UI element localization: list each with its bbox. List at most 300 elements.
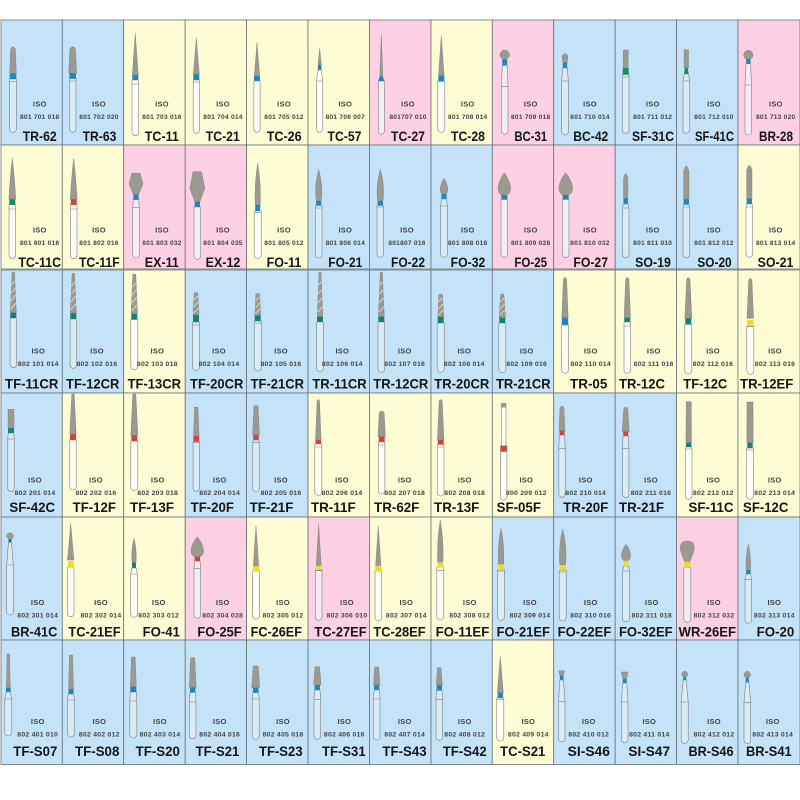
iso code: 801 813 014 <box>756 240 795 247</box>
iso code: 801 809 028 <box>511 240 550 247</box>
name: TC-S21 <box>500 743 546 759</box>
cell TF-12F <box>62 393 124 517</box>
name: TR-62 <box>23 128 57 144</box>
name: TF-13CR <box>128 376 181 392</box>
iso code: ISO <box>520 346 534 356</box>
iso code: ISO <box>768 346 782 356</box>
iso code: 801 706 007 <box>326 114 365 121</box>
bur <box>562 278 568 373</box>
bur <box>746 402 754 499</box>
name: SF-11C <box>688 499 734 515</box>
iso code: ISO <box>647 346 661 356</box>
iso code: 802 105 016 <box>261 361 301 368</box>
name: EX-12 <box>206 254 241 270</box>
name: TC-26 <box>267 128 302 144</box>
iso code: 802 203 018 <box>137 490 178 497</box>
iso code: ISO <box>92 717 106 726</box>
iso code: ISO <box>767 598 781 607</box>
iso code: ISO <box>212 346 226 356</box>
bur <box>254 43 260 132</box>
iso code <box>386 598 427 620</box>
iso code: ISO <box>706 346 720 356</box>
iso code: 801 801 016 <box>20 240 59 247</box>
bur <box>70 394 76 490</box>
name: TC-11 <box>145 128 179 144</box>
iso code: ISO <box>584 346 598 356</box>
bur <box>8 409 14 492</box>
cell TR-20CR <box>431 270 492 393</box>
iso code: 801 705 012 <box>264 114 304 121</box>
iso code <box>568 717 609 738</box>
iso code <box>263 598 303 620</box>
name: TC-57 <box>328 128 362 144</box>
cell TC-28 <box>431 20 492 145</box>
iso code: ISO <box>766 717 780 726</box>
bur <box>191 537 204 618</box>
name: BC-31 <box>514 128 547 144</box>
name: TR-62F <box>374 499 420 515</box>
iso code: ISO <box>579 476 593 484</box>
name: TF-21CR <box>251 376 304 392</box>
name: TR-12C <box>619 376 665 392</box>
name: TC-27EF <box>314 624 367 640</box>
iso code <box>384 717 425 738</box>
name: TF-S23 <box>259 743 303 759</box>
iso code: ISO <box>31 598 45 607</box>
bur <box>437 520 444 620</box>
cell TF-21CR <box>247 270 308 393</box>
iso code: ISO <box>153 717 167 726</box>
iso code: ISO <box>401 100 415 108</box>
name: FO-20 <box>757 624 795 640</box>
name: TR-11CR <box>312 376 367 392</box>
bur <box>683 50 690 133</box>
iso code: 802 413 014 <box>752 732 793 738</box>
cell TF-S43 <box>370 640 431 764</box>
iso code: ISO <box>707 717 721 726</box>
iso code: ISO <box>92 100 106 108</box>
iso code <box>752 717 793 738</box>
iso code <box>756 100 795 121</box>
bur <box>436 668 443 740</box>
iso code: 802 104 014 <box>199 361 239 368</box>
bur <box>10 47 16 132</box>
iso code <box>137 476 178 497</box>
iso code: 802 109 016 <box>506 361 547 368</box>
bur <box>438 36 445 132</box>
bur <box>192 293 200 370</box>
bur <box>685 402 692 499</box>
iso code: 801 708 014 <box>448 114 487 121</box>
iso code <box>261 476 301 497</box>
bur <box>130 657 137 738</box>
iso code: 801 806 014 <box>326 240 365 247</box>
bur <box>437 294 444 372</box>
iso code: ISO <box>151 476 165 484</box>
cell BR-S46 <box>677 640 738 764</box>
iso code: ISO <box>276 598 290 607</box>
name: TR-63 <box>83 128 117 144</box>
iso code <box>326 226 365 247</box>
cell TC-28EF <box>370 517 431 640</box>
iso code: 802 201 014 <box>15 490 55 497</box>
name: SI-S47 <box>628 743 670 759</box>
cell TC-27EF <box>308 517 370 640</box>
iso code: ISO <box>458 717 472 726</box>
iso code: 801 802 016 <box>79 240 119 247</box>
iso code: ISO <box>337 717 351 726</box>
iso code: 802 405 018 <box>263 732 303 738</box>
cell FO-25F <box>185 517 247 640</box>
iso code: 802 401 010 <box>17 732 58 738</box>
iso code <box>18 346 59 368</box>
bur <box>131 274 138 370</box>
iso code <box>15 476 55 497</box>
iso code: 802 107 016 <box>384 361 425 368</box>
cell SF-42C <box>1 393 62 517</box>
iso code: ISO <box>398 476 412 484</box>
iso code: 802 408 012 <box>444 732 485 738</box>
iso code: ISO <box>519 476 533 484</box>
iso code: ISO <box>89 476 103 484</box>
cell TR-05 <box>554 270 615 393</box>
iso code <box>448 226 487 247</box>
name: FO-11 <box>267 254 302 270</box>
iso code: 801 704 014 <box>203 114 243 121</box>
bur <box>745 544 752 623</box>
cell BR-S41 <box>738 640 800 764</box>
bur <box>189 658 196 739</box>
iso code <box>448 100 487 121</box>
cell TC-21 <box>185 20 247 145</box>
name: SO-20 <box>697 254 732 270</box>
cell FO-41 <box>124 517 185 640</box>
iso code: 802 402 012 <box>79 732 120 738</box>
iso code: 802 403 014 <box>140 732 180 738</box>
iso code: 801 804 035 <box>203 240 243 247</box>
iso code <box>79 226 119 247</box>
name: TF-S21 <box>196 743 240 759</box>
bur <box>437 400 444 496</box>
iso code: ISO <box>150 346 164 356</box>
iso code <box>570 100 610 121</box>
iso code: 802 202 016 <box>76 490 116 497</box>
bur <box>500 50 509 134</box>
cell FO-32EF <box>615 517 677 640</box>
bur <box>5 654 12 736</box>
bur <box>559 173 573 258</box>
bur <box>69 47 77 132</box>
iso code: ISO <box>582 717 596 726</box>
iso code: ISO <box>33 100 47 108</box>
iso code: 801 810 032 <box>570 240 610 247</box>
name: SF-41C <box>695 128 734 144</box>
iso code: 802 206 014 <box>322 490 362 497</box>
cell SI-S47 <box>615 640 677 764</box>
cell TR-21CR <box>492 270 554 393</box>
bur <box>317 272 323 372</box>
iso code: 802 111 016 <box>634 361 674 368</box>
iso code: 801 803 032 <box>142 240 182 247</box>
iso code: ISO <box>400 226 414 234</box>
name: TF-12CR <box>66 376 119 392</box>
name: TC-21EF <box>68 624 121 640</box>
iso code <box>756 226 795 247</box>
iso code <box>565 476 606 497</box>
iso code: 800 209 012 <box>506 490 547 497</box>
cell TF-S20 <box>124 640 185 764</box>
iso code <box>694 598 734 620</box>
iso code: 802 211 016 <box>631 490 671 497</box>
iso code: ISO <box>521 717 535 726</box>
iso code: ISO <box>276 717 290 726</box>
iso code <box>449 598 490 620</box>
iso code: 802 108 014 <box>444 361 485 368</box>
bur <box>377 169 384 257</box>
iso code: 802 301 014 <box>17 612 58 620</box>
cell TR-11CR <box>308 270 370 393</box>
bur <box>252 666 260 739</box>
iso code <box>693 346 733 368</box>
name: TC-11F <box>79 254 120 270</box>
cell TF-13CR <box>124 270 185 393</box>
cell TR-62 <box>1 20 62 145</box>
name: SI-S46 <box>568 743 610 759</box>
iso code: ISO <box>155 226 169 234</box>
iso code: ISO <box>768 476 782 484</box>
bur <box>683 166 690 258</box>
bur <box>500 403 507 500</box>
cell TF-S23 <box>247 640 308 764</box>
bur <box>70 158 77 259</box>
name: SF-42C <box>9 499 55 515</box>
cell TC-11C <box>1 145 62 270</box>
bur <box>746 165 753 257</box>
cell SO-19 <box>615 145 677 270</box>
name: TC-28EF <box>373 624 426 640</box>
iso code <box>629 717 670 738</box>
bur <box>562 54 568 135</box>
iso code: 801 703 016 <box>142 114 182 121</box>
iso code: 802 101 014 <box>18 361 59 368</box>
name: SF-05F <box>497 499 541 515</box>
iso code: ISO <box>463 598 477 607</box>
iso code <box>203 226 243 247</box>
name: TF-12C <box>683 376 727 392</box>
iso code <box>384 476 425 497</box>
iso code <box>322 346 363 368</box>
name: SO-19 <box>635 254 671 270</box>
cell FO-22 <box>370 145 431 270</box>
bur <box>621 672 628 743</box>
bur <box>744 671 751 744</box>
iso code: ISO <box>152 598 166 607</box>
iso code: ISO <box>216 100 230 108</box>
iso code <box>263 717 303 738</box>
iso code: 802 112 016 <box>693 361 733 368</box>
iso code: ISO <box>524 226 538 234</box>
bur <box>9 158 16 259</box>
iso code: ISO <box>338 100 352 108</box>
bur <box>559 529 566 621</box>
iso code: 801 701 018 <box>20 114 59 121</box>
iso code <box>506 346 547 368</box>
iso code <box>508 717 549 738</box>
iso code: ISO <box>769 226 783 234</box>
bur <box>7 533 13 615</box>
bur <box>193 38 199 133</box>
iso code <box>137 346 178 368</box>
iso code: ISO <box>645 598 659 607</box>
iso code <box>570 226 610 247</box>
cell TF-S21 <box>185 640 247 764</box>
iso code: 802 113 016 <box>755 361 795 368</box>
bur <box>70 273 76 368</box>
bur <box>131 394 138 491</box>
cell TF-20CR <box>185 270 247 393</box>
bur <box>559 406 565 497</box>
iso code: 801807 016 <box>388 240 426 247</box>
bur <box>317 48 323 132</box>
name: SF-12C <box>743 499 788 515</box>
iso code <box>693 476 734 497</box>
bur <box>315 400 322 495</box>
iso code <box>324 717 365 738</box>
name: BR-28 <box>759 128 793 144</box>
iso code: 802 303 012 <box>138 612 179 620</box>
iso code: 802 312 032 <box>694 612 734 620</box>
bur <box>190 172 205 259</box>
iso code <box>202 598 243 620</box>
iso code: 802 404 016 <box>199 732 240 738</box>
iso code: ISO <box>33 226 47 234</box>
bur <box>747 278 754 374</box>
iso code: 801 711 012 <box>633 114 672 121</box>
cell TF-11CR <box>1 270 62 393</box>
iso code <box>79 100 119 121</box>
iso code: 802 304 028 <box>202 612 243 620</box>
iso code: 802 309 014 <box>510 612 550 620</box>
iso code: ISO <box>216 598 230 607</box>
name: TF-S31 <box>322 743 366 759</box>
cell SF-05F <box>492 393 554 517</box>
name: TF-11CR <box>5 376 58 392</box>
name: TR-21CR <box>496 376 551 392</box>
iso code: ISO <box>216 226 230 234</box>
iso code <box>79 717 120 738</box>
cell TR-62F <box>370 393 431 517</box>
cell TC-21EF <box>62 517 124 640</box>
bur <box>622 407 629 498</box>
iso code: ISO <box>457 346 471 356</box>
name: FC-26EF <box>251 624 302 640</box>
iso code: 801 712 010 <box>694 114 734 121</box>
iso code: ISO <box>644 476 658 484</box>
iso code: ISO <box>335 346 349 356</box>
iso code: ISO <box>31 717 45 726</box>
iso code: ISO <box>524 100 538 108</box>
name: TR-12EF <box>740 376 794 392</box>
iso code <box>140 717 180 738</box>
cell FO-21 <box>308 145 370 270</box>
iso code: 802 313 014 <box>754 612 795 620</box>
bur <box>624 278 631 373</box>
name: BR-41C <box>11 624 57 640</box>
iso code <box>694 717 734 738</box>
bur <box>378 34 384 134</box>
iso code <box>199 717 240 738</box>
iso code <box>264 100 304 121</box>
name: TF-20F <box>191 499 234 515</box>
iso code: 802 102 016 <box>77 361 117 368</box>
cell SF-31C <box>615 20 677 145</box>
iso code: ISO <box>338 226 352 234</box>
iso code <box>510 598 550 620</box>
iso code <box>633 226 672 247</box>
iso code <box>631 598 672 620</box>
iso code <box>444 717 485 738</box>
bur <box>253 526 259 619</box>
iso code <box>444 346 485 368</box>
name: FO-21 <box>328 254 362 270</box>
cell TF-S08 <box>62 640 124 764</box>
bur <box>498 173 511 257</box>
name: FO-41 <box>143 624 180 640</box>
cell TF-12C <box>677 270 738 393</box>
name: FO-25F <box>197 624 242 640</box>
iso code <box>203 100 243 121</box>
iso code <box>633 100 672 121</box>
bur <box>685 278 692 374</box>
name: TR-20F <box>563 499 609 515</box>
iso code <box>570 346 611 368</box>
cell BC-31 <box>492 20 554 145</box>
iso code <box>327 598 367 620</box>
cell TC-S21 <box>492 640 554 764</box>
iso code: ISO <box>769 100 783 108</box>
name: FO-22EF <box>558 624 612 640</box>
iso code <box>506 476 547 497</box>
iso code <box>694 226 734 247</box>
iso code: 802 204 014 <box>199 490 240 497</box>
name: WR-26EF <box>679 624 736 640</box>
bur <box>622 173 629 258</box>
name: BC-42 <box>573 128 608 144</box>
name: TR-05 <box>570 376 608 392</box>
cell TC-26 <box>247 20 308 145</box>
name: TF-20CR <box>190 376 243 392</box>
iso code: ISO <box>340 598 354 607</box>
name: TF-S20 <box>136 743 180 759</box>
cell BR-28 <box>738 20 800 145</box>
bur <box>131 538 137 617</box>
name: FO-27 <box>573 254 608 270</box>
name: TR-11F <box>311 499 356 515</box>
name: TC-27 <box>391 128 425 144</box>
bur <box>67 523 74 617</box>
iso code: 801 702 020 <box>79 114 119 121</box>
cell FO-20 <box>738 517 800 640</box>
iso code <box>261 346 301 368</box>
bur <box>497 657 504 741</box>
cell TC-11 <box>124 20 185 145</box>
iso code <box>17 717 58 738</box>
cell TC-57 <box>308 20 370 145</box>
iso code: 801 710 014 <box>570 114 610 121</box>
cell EX-11 <box>124 145 185 270</box>
cell TF-21F <box>247 393 308 517</box>
bur <box>254 163 261 258</box>
